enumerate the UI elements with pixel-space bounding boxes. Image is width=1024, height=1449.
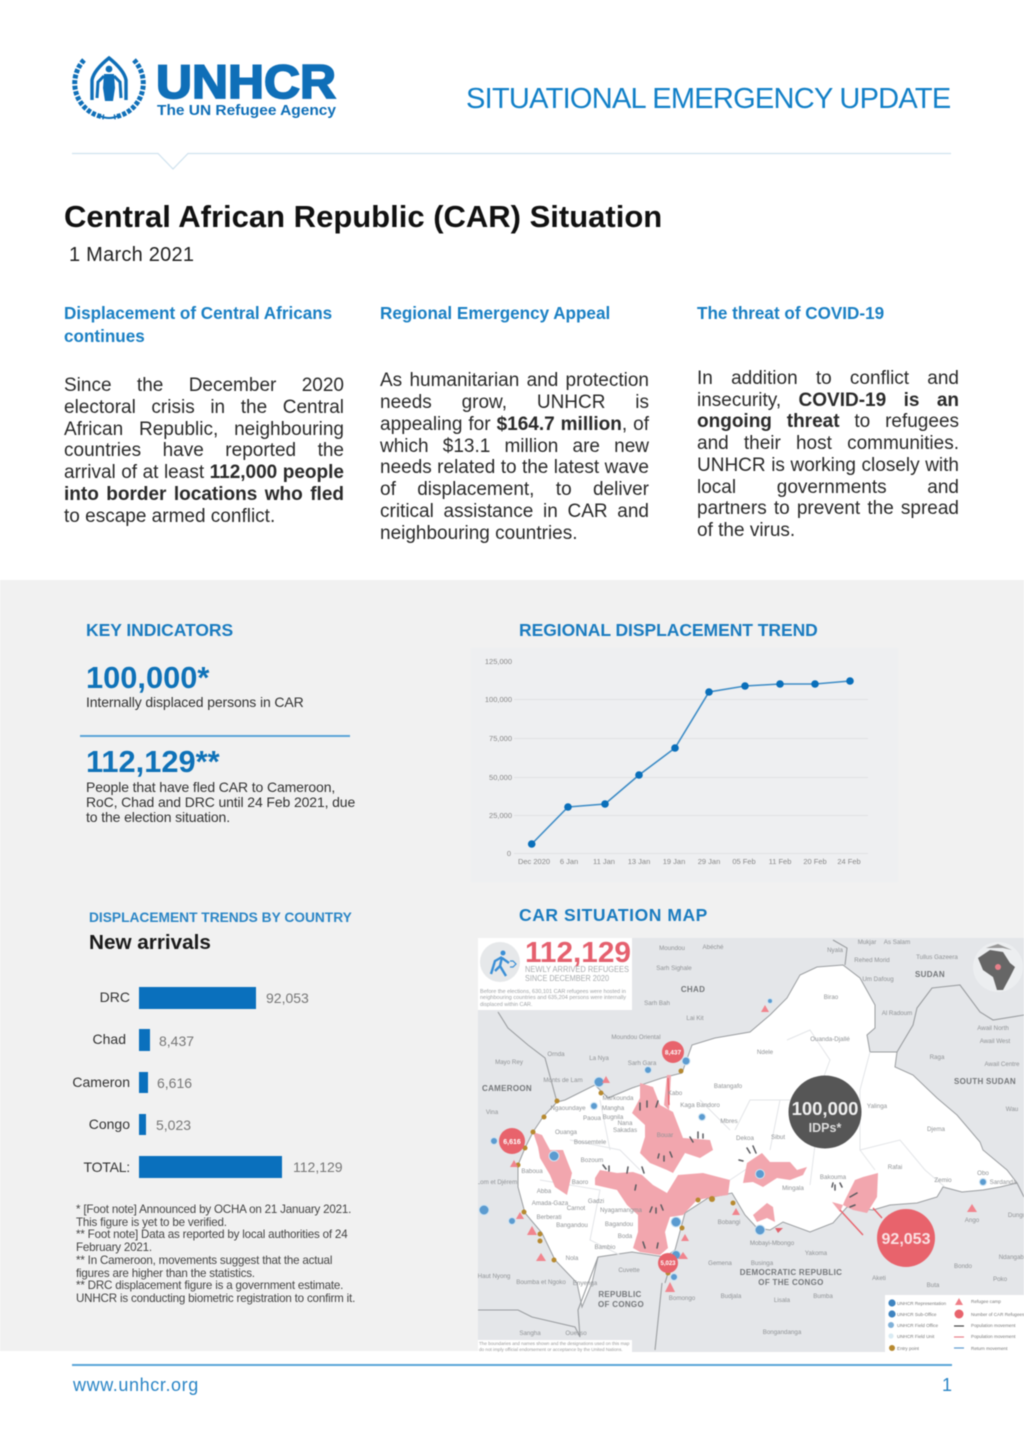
place labels: Yalinga xyxy=(867,1103,888,1110)
text block: appeal: appealing for $164.7 million, of xyxy=(380,414,649,435)
title: Central African Republic (CAR) Situation xyxy=(64,199,662,234)
footnotes: ** DRC displacement figure is a government estimate. xyxy=(76,1279,343,1292)
country names xyxy=(482,970,1016,1309)
place labels: Bakouma xyxy=(820,1174,847,1181)
bar chart: new arrivals: Congo xyxy=(89,1116,130,1132)
place labels: Bongandanga xyxy=(763,1329,802,1336)
text block: covid: insecurity, COVID-19 is an xyxy=(697,390,959,411)
place labels: Nyagamangma xyxy=(600,1207,643,1214)
place labels: Zemio xyxy=(934,1177,952,1184)
place labels: Moundou Oriental xyxy=(611,1034,661,1041)
map intro text: Before the elections, 630,101 CAR refugees were hosted in xyxy=(480,989,626,995)
place labels: Baboua xyxy=(521,1168,543,1175)
caption: Internally displaced persons in CAR xyxy=(86,694,304,710)
map title box xyxy=(478,937,632,1010)
legend: UNHCR Sub-Office xyxy=(897,1312,937,1317)
heading: key indicators: KEY INDICATORS xyxy=(86,620,233,640)
UNHCR office markers xyxy=(479,998,986,1280)
place labels: Aketi xyxy=(872,1275,886,1282)
text block: covid: and their host communities. xyxy=(697,433,959,454)
bar chart: new arrivals: DRC xyxy=(100,989,130,1005)
place labels: Mbres xyxy=(720,1118,738,1125)
column heading: displacement: Displacement of Central Africans xyxy=(64,304,332,323)
place labels: Gadzi xyxy=(588,1198,604,1205)
y axis labels: 25,000 xyxy=(489,811,512,820)
place labels: Berberati xyxy=(536,1214,562,1221)
place labels: Sarh Bah xyxy=(644,1000,670,1007)
place labels: Nana xyxy=(618,1120,633,1127)
number: 112,129** xyxy=(86,744,220,779)
callout: Cameroon refugees circle xyxy=(499,1128,525,1154)
place labels: Awail West xyxy=(980,1038,1010,1045)
text block: appeal: of displacement, to deliver xyxy=(380,479,649,500)
map intro text xyxy=(480,989,626,1008)
text block: appeal: As humanitarian and protection xyxy=(380,370,649,391)
bar chart: new arrivals: 6,616 xyxy=(157,1075,192,1091)
footnotes xyxy=(76,1203,355,1306)
callout: IDPs circle xyxy=(788,1076,862,1148)
place labels: Um Dafoug xyxy=(862,976,894,983)
callout: Cameroon refugees circle: 6,616 xyxy=(503,1139,521,1146)
icon: UNHCR emblem xyxy=(75,58,143,118)
bar chart: new arrivals: Chad xyxy=(93,1031,126,1047)
caption: to the election situation. xyxy=(86,809,230,825)
callout: DRC refugees circle xyxy=(877,1209,935,1267)
callout: Chad refugees circle xyxy=(662,1041,684,1063)
place labels: Mingala xyxy=(782,1185,804,1192)
footnotes: figures are higher than the statistics. xyxy=(76,1267,255,1280)
place labels: Raga xyxy=(930,1054,945,1061)
y axis labels: 125,000 xyxy=(485,657,512,666)
place labels: As Salam xyxy=(884,939,910,946)
tagline: The UN Refugee Agency xyxy=(157,103,336,119)
place labels: Al Radoum xyxy=(882,1010,912,1017)
wordmark: UNHCR xyxy=(156,55,336,108)
bar chart: new arrivals xyxy=(72,986,343,1179)
place labels: Ornda xyxy=(547,1051,565,1058)
place labels: Poko xyxy=(993,1276,1008,1283)
place labels: Boumba et Ngoko xyxy=(516,1279,566,1286)
place labels: Dekoa xyxy=(736,1135,754,1142)
population movement arrows xyxy=(668,1078,882,1235)
heading: regional trend: REGIONAL DISPLACEMENT TREND xyxy=(519,620,818,640)
y axis labels: 75,000 xyxy=(489,734,512,743)
place labels: Sibut xyxy=(771,1134,785,1141)
place labels: Sakadas xyxy=(613,1127,637,1134)
place labels: Monts de Lam xyxy=(543,1077,583,1084)
x axis labels: Dec 2020 xyxy=(518,857,550,866)
text block: displacement: countries have reported the xyxy=(64,440,344,461)
country names: SUDAN xyxy=(915,970,945,979)
x axis labels: 13 Jan xyxy=(628,857,650,866)
place labels: Amada-Gaza xyxy=(532,1200,569,1207)
place labels: Markounda xyxy=(603,1095,634,1102)
legend xyxy=(885,1295,1024,1352)
bar chart: new arrivals: 5,023 xyxy=(156,1117,191,1133)
map intro text: neighbouring countries and 635,204 persons were internally xyxy=(480,995,626,1001)
map intro text: displaced within CAR. xyxy=(480,1002,532,1008)
text block: appeal: needs grow, UNHCR is xyxy=(380,392,649,413)
y axis labels: 0 xyxy=(507,849,511,858)
place labels: Wau xyxy=(1006,1106,1019,1113)
callout: DRC refugees circle: 92,053 xyxy=(882,1231,931,1248)
column heading: displacement xyxy=(64,304,332,346)
place labels: Sarh Sighale xyxy=(656,965,692,972)
place labels: Mayo Rey xyxy=(495,1059,524,1066)
place labels: Moundou xyxy=(659,945,685,952)
legend: UNHCR Field Office xyxy=(897,1323,938,1328)
place labels: Lai Kit xyxy=(686,1015,704,1022)
text block: displacement: to escape armed conflict. xyxy=(64,506,275,527)
place labels: Carnot xyxy=(567,1205,586,1212)
place labels: Boda xyxy=(618,1233,633,1240)
subheading: new arrivals: New arrivals xyxy=(89,931,211,954)
place labels: Sardanda xyxy=(990,1179,1017,1186)
place labels: Nola xyxy=(566,1255,579,1262)
legend: Population movement xyxy=(971,1323,1016,1328)
x axis labels: 11 Feb xyxy=(769,857,791,866)
place labels: Ouanga xyxy=(555,1129,578,1136)
refugee camp markers xyxy=(510,1005,977,1292)
place labels: Bozoum xyxy=(581,1157,603,1164)
place labels: Batangafo xyxy=(714,1083,743,1090)
country names: CHAD xyxy=(681,985,705,994)
place labels: Djema xyxy=(927,1126,945,1133)
text block: displacement: electoral crisis in the Central xyxy=(64,397,344,418)
place labels: Bouar xyxy=(657,1132,673,1139)
place labels: Bobangi xyxy=(718,1219,740,1226)
x axis labels: 29 Jan xyxy=(698,857,720,866)
text block: appeal: which $13.1 million are new xyxy=(380,436,649,457)
footnotes: February 2021. xyxy=(76,1241,152,1254)
footnotes: ** Foot note] Data as reported by local authorities of 24 xyxy=(76,1228,347,1241)
place labels: Bomongo xyxy=(669,1295,696,1302)
x axis labels: 19 Jan xyxy=(663,857,685,866)
legend: Population movement xyxy=(971,1334,1016,1339)
footer rule xyxy=(72,1364,952,1366)
text block: appeal: critical assistance in CAR and xyxy=(380,501,649,522)
text block: displacement: into border locations who fled xyxy=(64,484,344,505)
text block: appeal xyxy=(379,370,650,544)
place labels: Awail North xyxy=(977,1025,1009,1032)
place labels: Enyenga xyxy=(573,1280,598,1287)
place labels: Bangandou xyxy=(556,1222,588,1229)
bar chart: new arrivals: 112,129 xyxy=(293,1159,343,1175)
country names: OF THE CONGO xyxy=(758,1278,824,1287)
x axis labels: 11 Jan xyxy=(593,857,615,866)
legend: Number of CAR Refugees xyxy=(971,1312,1024,1317)
number: 100,000* xyxy=(86,660,209,695)
footnotes: ** In Cameroon, movements suggest that the actual xyxy=(76,1254,332,1267)
entry point markers xyxy=(516,1068,736,1276)
bar chart: new arrivals: 8,437 xyxy=(159,1033,194,1049)
place labels: Nyala xyxy=(827,947,843,954)
text block: covid: of the virus. xyxy=(697,520,795,541)
text block: covid: UNHCR is working closely with xyxy=(697,455,959,476)
place labels: Buta xyxy=(927,1282,940,1289)
country names: OF CONGO xyxy=(598,1300,644,1309)
country names: REPUBLIC xyxy=(598,1290,642,1299)
place labels: Ouesso xyxy=(565,1330,587,1337)
line chart: regional displacement trend xyxy=(485,657,868,866)
map subhead: SINCE DECEMBER 2020 xyxy=(525,974,610,983)
y axis labels: 50,000 xyxy=(489,773,512,782)
text block: covid: In addition to conflict and xyxy=(697,368,959,389)
place labels: Bugnila xyxy=(603,1114,624,1121)
footnotes: * [Foot note] Announced by OCHA on 21 January 2021. xyxy=(76,1203,351,1216)
disclaimer box: The boundaries and names shown and the designations used on this map xyxy=(479,1341,630,1346)
heading: trends by country: DISPLACEMENT TRENDS BY COUNTRY xyxy=(89,910,352,925)
text block: displacement: African Republic, neighbouring xyxy=(64,419,344,440)
place labels: Kaga Bandoro xyxy=(680,1102,720,1109)
callout: Congo refugees circle: 5,023 xyxy=(660,1261,676,1267)
place labels: Mangha xyxy=(602,1105,625,1112)
CAR territory xyxy=(518,965,1017,1307)
legend: Return movement xyxy=(971,1346,1008,1351)
y axis labels xyxy=(485,657,512,858)
place labels: Baoro xyxy=(572,1179,589,1186)
place labels: Obo xyxy=(977,1170,989,1177)
callout: IDPs circle: IDPs* xyxy=(809,1121,841,1135)
x axis labels: 6 Jan xyxy=(560,857,578,866)
indicator: IDPs xyxy=(86,660,304,711)
place labels: Abba xyxy=(537,1188,552,1195)
place labels: Mobayi-Mbongo xyxy=(750,1240,795,1247)
text block: appeal: needs related to the latest wave xyxy=(380,457,649,478)
heading: map: CAR SITUATION MAP xyxy=(519,905,708,925)
x axis labels: 20 Feb xyxy=(803,857,827,866)
legend: Refugee camp xyxy=(971,1299,1001,1304)
place labels: Ndele xyxy=(757,1049,774,1056)
country names: SOUTH SUDAN xyxy=(954,1077,1016,1086)
caption xyxy=(86,779,356,825)
place labels: Yakoma xyxy=(805,1250,828,1257)
place labels: Bagandou xyxy=(605,1221,634,1228)
callout: Congo refugees circle xyxy=(658,1253,678,1273)
page number: 1 xyxy=(942,1375,952,1395)
callout: Chad refugees circle: 8,437 xyxy=(665,1050,682,1056)
footer link: www.unhcr.org xyxy=(73,1375,199,1395)
place labels: Ngaoundaye xyxy=(550,1105,586,1112)
text block: covid xyxy=(697,368,959,541)
logo: UNHCR xyxy=(71,55,338,120)
caption: People that have fled CAR to Cameroon, xyxy=(86,779,335,795)
place labels: Bossemtele xyxy=(574,1139,607,1146)
document type heading: SITUATIONAL EMERGENCY UPDATE xyxy=(466,83,950,115)
place labels: Haut Nyong xyxy=(478,1273,511,1280)
text block: appeal: neighbouring countries. xyxy=(380,523,578,544)
place labels: Kabo xyxy=(668,1090,683,1097)
place labels: Rehed Morid xyxy=(854,957,890,964)
place labels: Ouanda-Djallé xyxy=(810,1036,850,1043)
bar chart: new arrivals: TOTAL: xyxy=(83,1159,130,1175)
place labels: Bambio xyxy=(595,1244,616,1251)
x axis labels: 05 Feb xyxy=(732,857,756,866)
text block: covid: ongoing threat to refugees xyxy=(697,411,959,432)
map subhead: NEWLY ARRIVED REFUGEES xyxy=(525,965,629,974)
inset: globe locator xyxy=(973,942,1023,992)
panel: grey data section xyxy=(0,580,1024,1351)
internal boundaries xyxy=(540,1030,945,1255)
legend: Entry point xyxy=(897,1346,920,1351)
x axis labels xyxy=(518,857,861,866)
column heading: covid: The threat of COVID-19 xyxy=(697,304,884,323)
place labels: Ango xyxy=(965,1217,980,1224)
place labels: Vina xyxy=(486,1109,499,1116)
affected areas xyxy=(533,1075,878,1255)
disclaimer box xyxy=(478,1340,632,1352)
place labels: Tullus Gazeera xyxy=(916,954,958,961)
place labels: Awail Centre xyxy=(985,1061,1020,1068)
indicator: refugees xyxy=(86,744,356,825)
place labels: Sarh Gara xyxy=(628,1060,657,1067)
place labels: Lisala xyxy=(774,1297,791,1304)
place labels: Cuvette xyxy=(618,1267,640,1274)
place labels: Rafai xyxy=(888,1164,902,1171)
text block: displacement: arrival of at least 112,000 people xyxy=(64,462,344,483)
country names: CAMEROON xyxy=(482,1084,532,1093)
bar chart: new arrivals: Cameron xyxy=(72,1074,130,1090)
map subhead xyxy=(525,965,629,983)
text block: covid: local governments and xyxy=(697,477,959,498)
y axis labels: 100,000 xyxy=(485,695,512,704)
place labels xyxy=(477,939,1024,1337)
legend: UNHCR Representation xyxy=(897,1301,946,1306)
place labels: Businga xyxy=(751,1260,774,1267)
data line xyxy=(528,677,854,848)
date: 1 March 2021 xyxy=(69,244,194,266)
bar chart: new arrivals: 92,053 xyxy=(266,990,309,1006)
country names: DEMOCRATIC REPUBLIC xyxy=(740,1268,842,1277)
place labels: Abéché xyxy=(702,944,724,951)
map: CAR situation xyxy=(478,938,1024,1352)
place labels: Birao xyxy=(824,994,839,1001)
text block: covid: partners to prevent the spread xyxy=(697,498,959,519)
text block: displacement xyxy=(64,375,344,527)
footnotes: This figure is yet to be verified. xyxy=(76,1216,227,1229)
text block: displacement: Since the December 2020 xyxy=(64,375,344,396)
place labels: La Nya xyxy=(589,1055,609,1062)
caption: RoC, Chad and DRC until 24 Feb 2021, due xyxy=(86,794,355,810)
divider line xyxy=(80,735,350,737)
column heading: appeal: Regional Emergency Appeal xyxy=(380,304,610,323)
icon: fleeing person xyxy=(480,942,520,982)
column heading: displacement: continues xyxy=(64,327,145,346)
borders of neighbouring countries xyxy=(478,940,1024,1350)
disclaimer box: do not imply official endorsement or acceptance by the United Nations. xyxy=(479,1347,623,1352)
legend: UNHCR Field Unit xyxy=(897,1334,935,1339)
place labels: Bumba xyxy=(813,1293,833,1300)
place labels: Budjala xyxy=(721,1293,742,1300)
place labels: Mukjar xyxy=(858,939,876,946)
header rule with chevron xyxy=(72,152,952,170)
place labels: Gemena xyxy=(708,1260,732,1267)
footnotes: UNHCR is conducting biometric registration to confirm it. xyxy=(76,1292,355,1305)
x axis labels: 24 Feb xyxy=(837,857,861,866)
place labels: Bondo xyxy=(954,1263,972,1270)
callout: IDPs circle: 100,000 xyxy=(792,1098,858,1119)
place labels: Sangha xyxy=(519,1330,541,1337)
place labels: Paoua xyxy=(583,1115,601,1122)
